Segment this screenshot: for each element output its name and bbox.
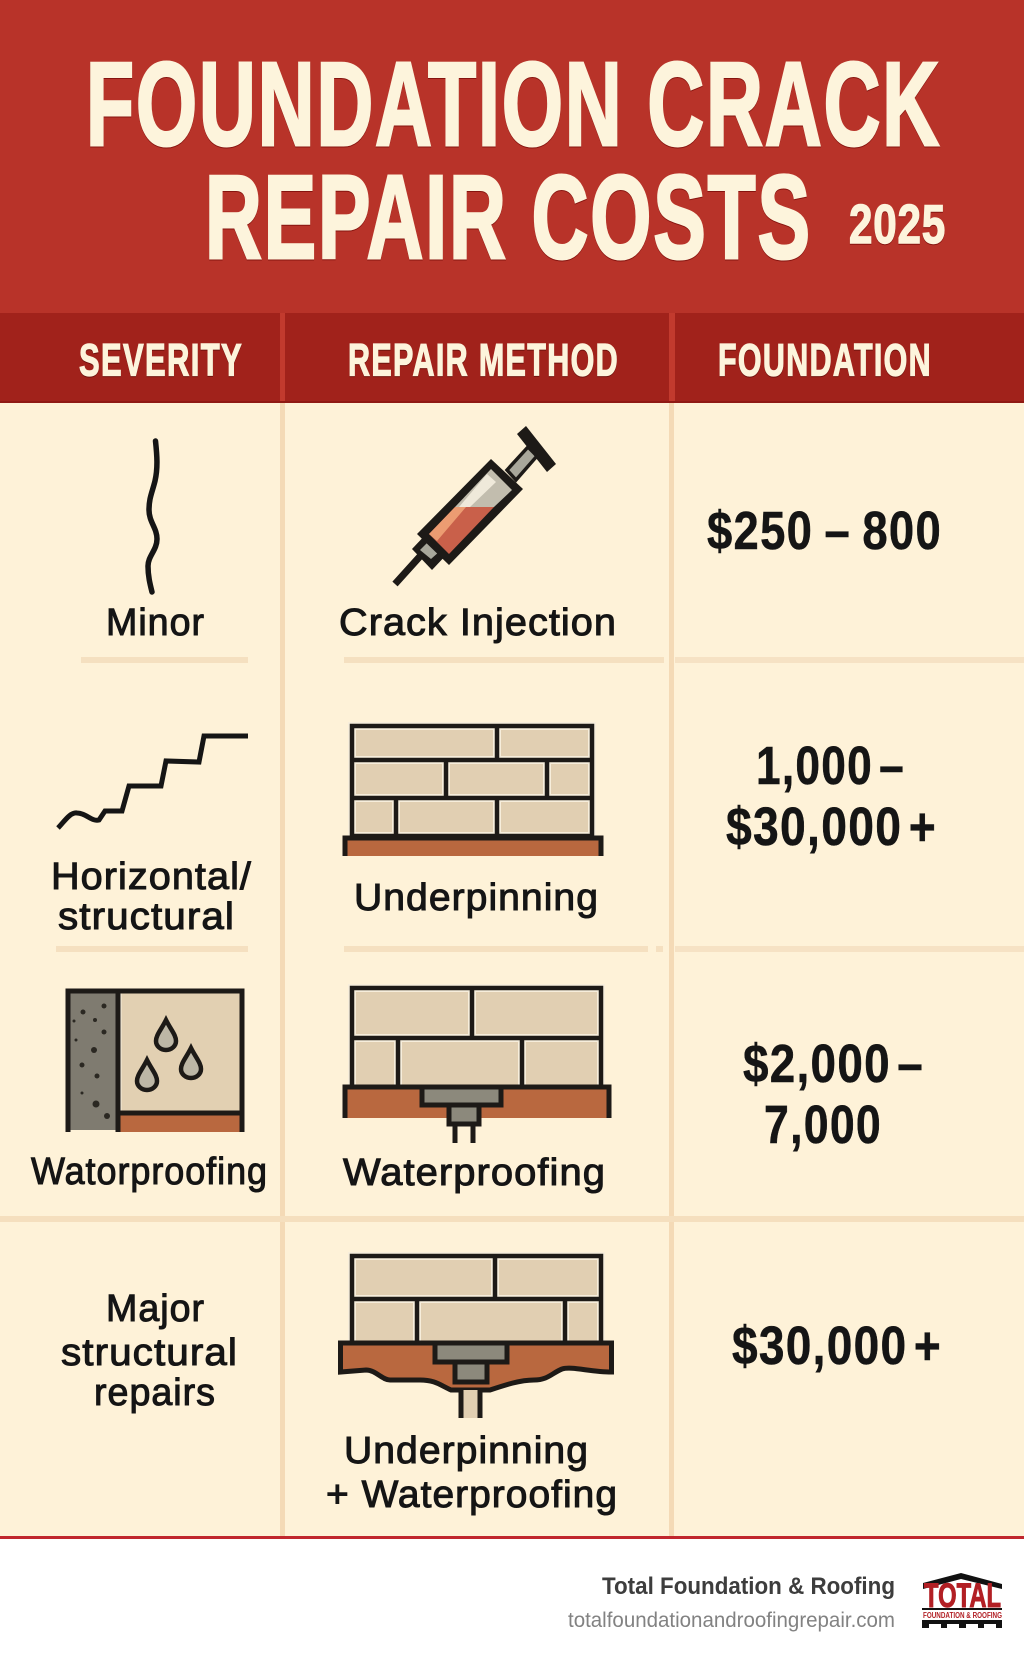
icon: underpinning with waterproofing [340,1256,612,1418]
table body background [0,403,1024,1537]
text: major structural repairs: structural [61,1332,238,1374]
text: underpinning: Underpinning [354,877,599,919]
row 3 [31,988,924,1194]
price: 250 to 800: $250 – 800 [707,501,942,561]
footer [568,1573,1002,1632]
icon: wet wall with water drops [68,991,242,1132]
title banner [0,0,1024,313]
price: 2000 to 7000 [743,1034,924,1155]
title [86,38,946,284]
text: waterproofing: Waterproofing [343,1152,606,1194]
logo: FOUNDATION & ROOFING [923,1611,1002,1620]
text: minor: Minor [106,602,205,644]
footer red rule [0,1536,1024,1539]
icon: injection syringe [395,426,556,584]
row 4 [61,1256,942,1516]
website: totalfoundationandroofingrepair.com [568,1609,895,1632]
price: 1000 to 30000 plus [726,736,937,857]
title: 2025 [849,193,946,255]
text: crack injection: Crack Injection [339,602,617,644]
text: underpinning plus waterproofing [326,1430,618,1516]
logo [922,1573,1002,1628]
icon: underpinning brick wall [345,726,601,856]
price: 30000 plus: $30,000 + [732,1316,942,1376]
company name: Total Foundation & Roofing [602,1573,895,1600]
icon: waterproofing wall section [345,988,609,1143]
header: severity: SEVERITY [79,334,243,386]
text: major structural repairs: Major [106,1288,205,1330]
price: 1000 to 30000 plus: 1,000 – [756,736,905,796]
price: 2000 to 7000: 7,000 [764,1095,882,1155]
text: watorproofing: Watorproofing [31,1151,268,1193]
price: 2000 to 7000: $2,000 – [743,1034,924,1094]
price: 1000 to 30000 plus: $30,000 + [726,797,937,857]
row 1 [106,426,942,644]
table header row [0,313,1024,403]
text: horizontal structural: structural [58,896,235,938]
row 2 [51,726,937,938]
icon: hairline crack [148,441,157,592]
icon: stair-step crack [58,736,248,828]
text: horizontal structural [51,856,252,938]
header: repair method: REPAIR METHOD [348,334,619,386]
text: major structural repairs [61,1288,238,1414]
text: major structural repairs: repairs [94,1372,216,1414]
text: horizontal structural: Horizontal/ [51,856,252,898]
text: underpinning plus waterproofing: Underpinning [344,1430,589,1472]
text: underpinning plus waterproofing: + Waterproofing [326,1474,618,1516]
